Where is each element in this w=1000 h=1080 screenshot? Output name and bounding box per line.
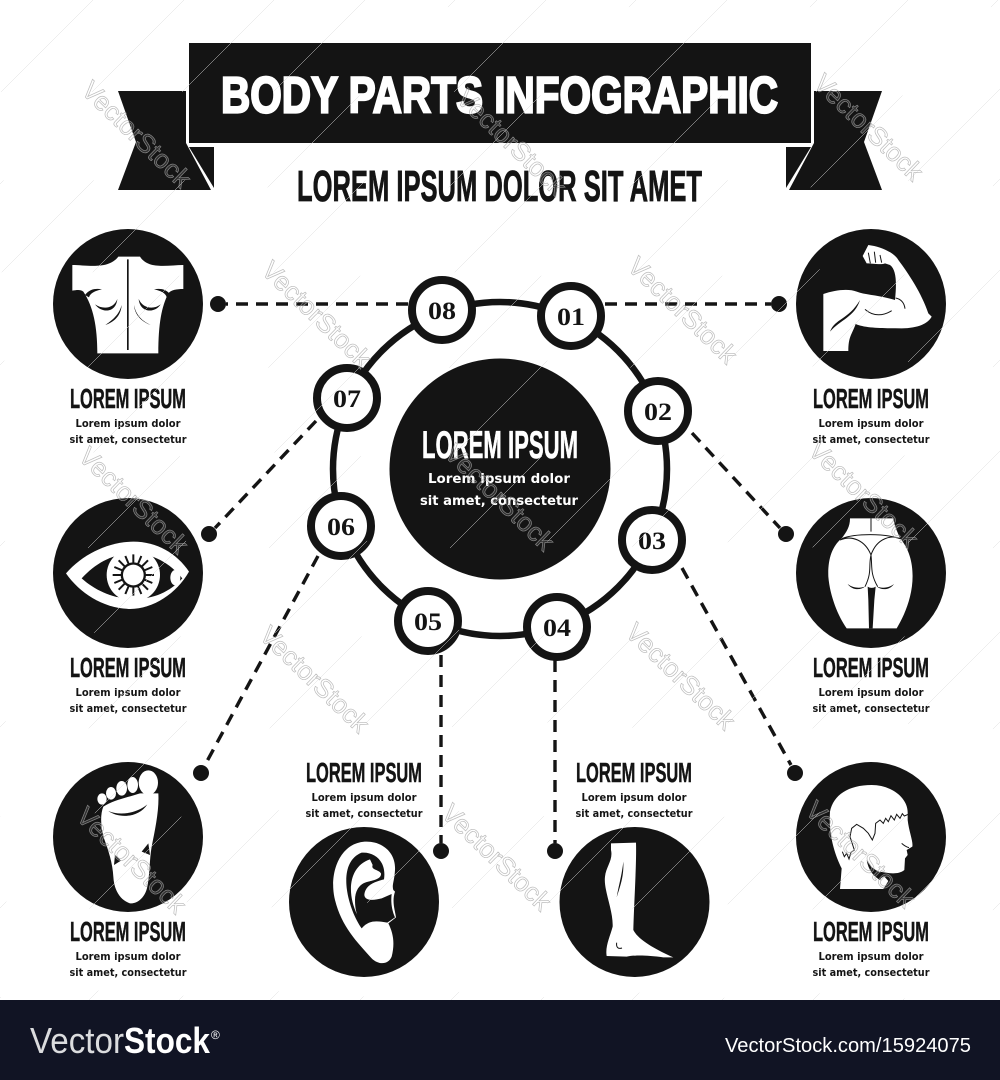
title: BODY PARTS INFOGRAPHIC bbox=[221, 66, 778, 124]
icon: bicep bbox=[823, 245, 932, 351]
node 01: 01 bbox=[557, 304, 585, 331]
node 05: 05 bbox=[414, 609, 442, 636]
heading: LOREM IPSUM bbox=[70, 652, 186, 683]
watermarks: VectorStock bbox=[803, 435, 925, 554]
watermarks: VectorStock bbox=[800, 795, 922, 914]
center text: sit amet, consectetur bbox=[420, 493, 578, 509]
watermarks: VectorStock bbox=[76, 75, 198, 194]
central ring diagram bbox=[311, 280, 688, 657]
icon: back bbox=[72, 257, 183, 353]
watermarks: VectorStock bbox=[622, 251, 744, 370]
icon: leg bbox=[605, 843, 673, 957]
footer logo: VectorStock bbox=[30, 1020, 211, 1061]
node 06: 06 bbox=[327, 514, 355, 541]
watermarks: VectorStock bbox=[620, 617, 742, 736]
text: sit amet, consectetur bbox=[576, 808, 693, 820]
heading: LOREM IPSUM bbox=[576, 757, 692, 788]
banner left tail bbox=[118, 91, 211, 190]
text: sit amet, consectetur bbox=[70, 434, 187, 446]
subtitle: LOREM IPSUM DOLOR SIT AMET bbox=[297, 162, 702, 211]
panel: head bbox=[796, 762, 946, 979]
node 03 bbox=[622, 510, 682, 570]
center text: Lorem ipsum dolor bbox=[428, 471, 570, 487]
node 03: 03 bbox=[638, 528, 666, 555]
panel: leg bbox=[560, 757, 710, 977]
text: sit amet, consectetur bbox=[812, 967, 930, 979]
icon: ear bbox=[333, 842, 396, 963]
text: Lorem ipsum dolor bbox=[582, 792, 687, 804]
center circle bbox=[390, 358, 610, 580]
text: sit amet, consectetur bbox=[812, 434, 930, 446]
footer bar bbox=[0, 1000, 1000, 1080]
watermarks: VectorStock bbox=[451, 83, 573, 202]
text: sit amet, consectetur bbox=[70, 703, 187, 715]
panel: eye bbox=[53, 498, 203, 715]
watermarks bbox=[71, 68, 930, 920]
text bbox=[812, 951, 930, 979]
text: sit amet, consectetur bbox=[70, 967, 187, 979]
node 02: 02 bbox=[644, 399, 672, 426]
banner right fold bbox=[786, 147, 811, 188]
watermarks: VectorStock bbox=[436, 798, 558, 917]
heading: LOREM IPSUM bbox=[70, 383, 186, 414]
text: Lorem ipsum dolor bbox=[76, 687, 181, 699]
node 07 bbox=[317, 368, 377, 428]
text: sit amet, consectetur bbox=[306, 808, 423, 820]
watermarks: VectorStock bbox=[256, 255, 378, 374]
node 07: 07 bbox=[333, 386, 361, 413]
icon: head bbox=[830, 785, 912, 889]
panel: bicep bbox=[796, 229, 946, 446]
watermarks: VectorStock bbox=[254, 620, 376, 739]
text bbox=[812, 687, 930, 715]
panel: ear bbox=[289, 757, 439, 977]
registered mark: ® bbox=[211, 1028, 220, 1042]
text bbox=[70, 687, 187, 715]
banner bbox=[118, 43, 882, 190]
footer url: VectorStock.com/15924075 bbox=[725, 1034, 971, 1057]
node 05 bbox=[398, 591, 458, 651]
watermarks: VectorStock bbox=[808, 68, 930, 187]
text: Lorem ipsum dolor bbox=[818, 418, 924, 430]
watermarks: VectorStock bbox=[71, 801, 193, 920]
node 08 bbox=[412, 280, 472, 340]
node 06 bbox=[311, 496, 371, 556]
node 01 bbox=[541, 286, 601, 346]
center heading: LOREM IPSUM bbox=[422, 424, 578, 467]
icon: foot bbox=[97, 770, 158, 903]
text: Lorem ipsum dolor bbox=[76, 418, 181, 430]
node 02 bbox=[628, 381, 688, 441]
panel: back bbox=[53, 229, 203, 446]
banner right tail bbox=[789, 91, 882, 190]
panel: foot bbox=[53, 762, 203, 979]
watermarks: VectorStock bbox=[73, 441, 195, 560]
node 04 bbox=[527, 597, 587, 657]
text bbox=[576, 792, 693, 820]
heading: LOREM IPSUM bbox=[306, 757, 422, 788]
icon: eye bbox=[66, 542, 189, 609]
text bbox=[70, 418, 187, 446]
text bbox=[306, 792, 423, 820]
text bbox=[70, 951, 187, 979]
watermarks: VectorStock bbox=[439, 438, 561, 557]
text bbox=[812, 418, 930, 446]
node 04: 04 bbox=[543, 615, 572, 642]
text: Lorem ipsum dolor bbox=[818, 951, 924, 963]
heading: LOREM IPSUM bbox=[70, 916, 186, 947]
node 08: 08 bbox=[428, 298, 456, 325]
connector lines bbox=[193, 296, 803, 859]
text: Lorem ipsum dolor bbox=[818, 687, 924, 699]
icon: buttocks bbox=[828, 518, 913, 628]
text: Lorem ipsum dolor bbox=[312, 792, 417, 804]
text: Lorem ipsum dolor bbox=[76, 951, 181, 963]
banner main bbox=[189, 43, 811, 143]
center text bbox=[420, 471, 578, 509]
banner left fold bbox=[189, 147, 214, 188]
panel: buttocks bbox=[796, 498, 946, 715]
text: sit amet, consectetur bbox=[812, 703, 930, 715]
